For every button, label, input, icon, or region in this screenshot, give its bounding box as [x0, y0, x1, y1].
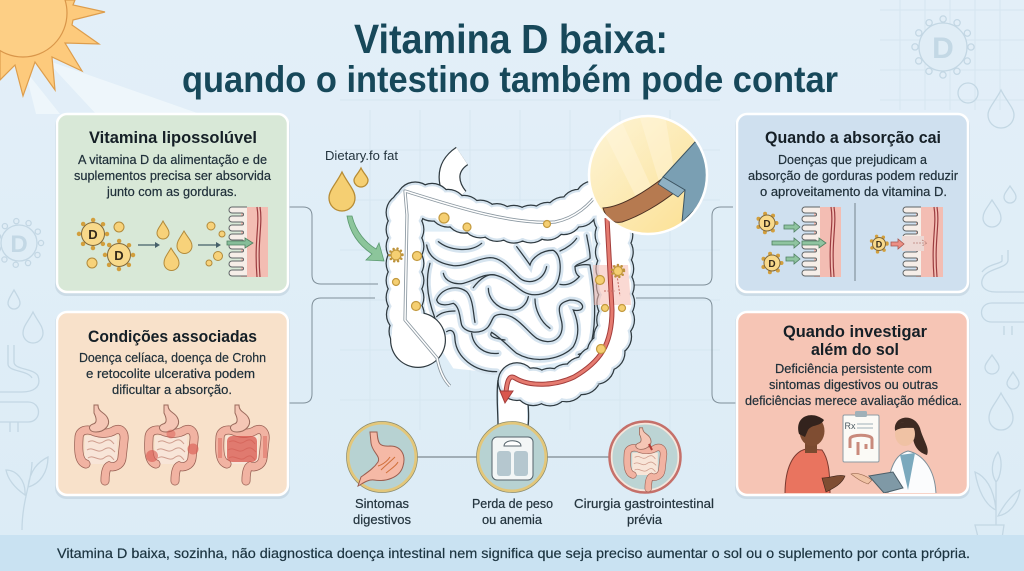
terminal ileum [450, 156, 462, 198]
heading: Quando a absorção cai [765, 128, 941, 147]
icon: prior surgery [610, 422, 680, 492]
icon: fat drops [329, 168, 368, 211]
illustration: patient and doctor [785, 411, 936, 494]
inflamed area [593, 265, 631, 305]
panel: quando a absorção cai [735, 114, 970, 296]
diagram: normal vs reduced absorption: D [763, 219, 771, 230]
heading [783, 322, 927, 359]
body text [74, 152, 272, 199]
label: cirurgia gastrointestinal prévia [574, 497, 714, 527]
label: cirurgia gastrointestinal prévia: Cirurgia gastrointestinal [574, 497, 714, 511]
body text: absorção de gorduras podem reduzir [748, 168, 959, 183]
body text [745, 361, 962, 408]
body text: sintomas digestivos ou outras [769, 377, 938, 392]
body text: e retocolite ulcerativa podem [86, 366, 255, 381]
illustration: patient and doctor: Rx [844, 421, 856, 431]
diagram: normal vs reduced absorption: D [768, 259, 776, 270]
heading: Condições associadas [88, 327, 257, 346]
icons: three intestines [79, 405, 265, 481]
panel: vitamina lipossolúvel [55, 114, 290, 296]
taenia lines and appendix [405, 190, 600, 386]
decorative icons: D [932, 32, 954, 65]
colon [390, 196, 616, 388]
label: perda de peso ou anemia [472, 497, 553, 527]
label: sintomas digestivos: Sintomas [355, 497, 409, 511]
red absorption path [506, 218, 612, 392]
body text: Doença celíaca, doença de Crohn [79, 350, 266, 365]
heading: além do sol [811, 340, 899, 359]
small intestine [425, 232, 598, 373]
body text: Doenças que prejudicam a [778, 152, 928, 167]
illustration: sunlit arm [589, 115, 710, 234]
diagram: absorption with fats: D [114, 248, 124, 263]
footer band [0, 535, 1024, 571]
body text: Deficiência persistente com [775, 361, 932, 376]
body text [79, 350, 266, 397]
diagram: normal vs reduced absorption [758, 203, 943, 281]
timeline connector [415, 456, 612, 458]
panel: condições associadas [55, 312, 290, 499]
label: dietary fat: Dietary.fo fat [325, 149, 399, 163]
heading: Vitamina lipossolúvel [89, 128, 257, 147]
title: quando o intestino também pode contar [182, 59, 838, 100]
label: perda de peso ou anemia: ou anemia [482, 513, 542, 527]
icon: sun [0, 0, 105, 96]
body text: junto com as gorduras. [106, 184, 237, 199]
light rays [25, 60, 200, 114]
label: cirurgia gastrointestinal prévia: prévia [627, 513, 662, 527]
title [182, 16, 838, 100]
label: sintomas digestivos: digestivos [353, 513, 411, 527]
arrow: fat into intestine [347, 216, 384, 261]
icon: stomach [346, 422, 418, 492]
body text [748, 152, 959, 199]
decorative icons: D [10, 231, 28, 258]
body text: dificultar a absorção. [112, 382, 232, 397]
panel: quando investigar além do sol [735, 312, 970, 499]
diagram: normal vs reduced absorption: D [876, 240, 883, 250]
body text: A vitamina D da alimentação e de [78, 152, 267, 167]
body text: deficiências merece avaliação médica. [745, 393, 962, 408]
vitamin D dots [391, 213, 626, 354]
rectum [497, 380, 529, 426]
heading: Quando investigar [783, 322, 927, 341]
footer note: Vitamina D baixa, sozinha, não diagnostica doença intestinal nem significa que seja preciso aumentar o sol ou o suplemento por conta própria. [57, 545, 970, 561]
body text: suplementos precisa ser absorvida [74, 168, 272, 183]
label: perda de peso ou anemia: Perda de peso [472, 497, 553, 511]
label: sintomas digestivos [353, 497, 411, 527]
diagram: small intestine and colon [390, 156, 631, 426]
connectors [289, 207, 736, 403]
diagram: absorption with fats: D [88, 227, 98, 242]
body text: o aproveitamento da vitamina D. [760, 184, 947, 199]
diagram: absorption with fats [79, 207, 268, 277]
title: Vitamina D baixa: [354, 16, 668, 62]
icon: scale [476, 422, 548, 492]
